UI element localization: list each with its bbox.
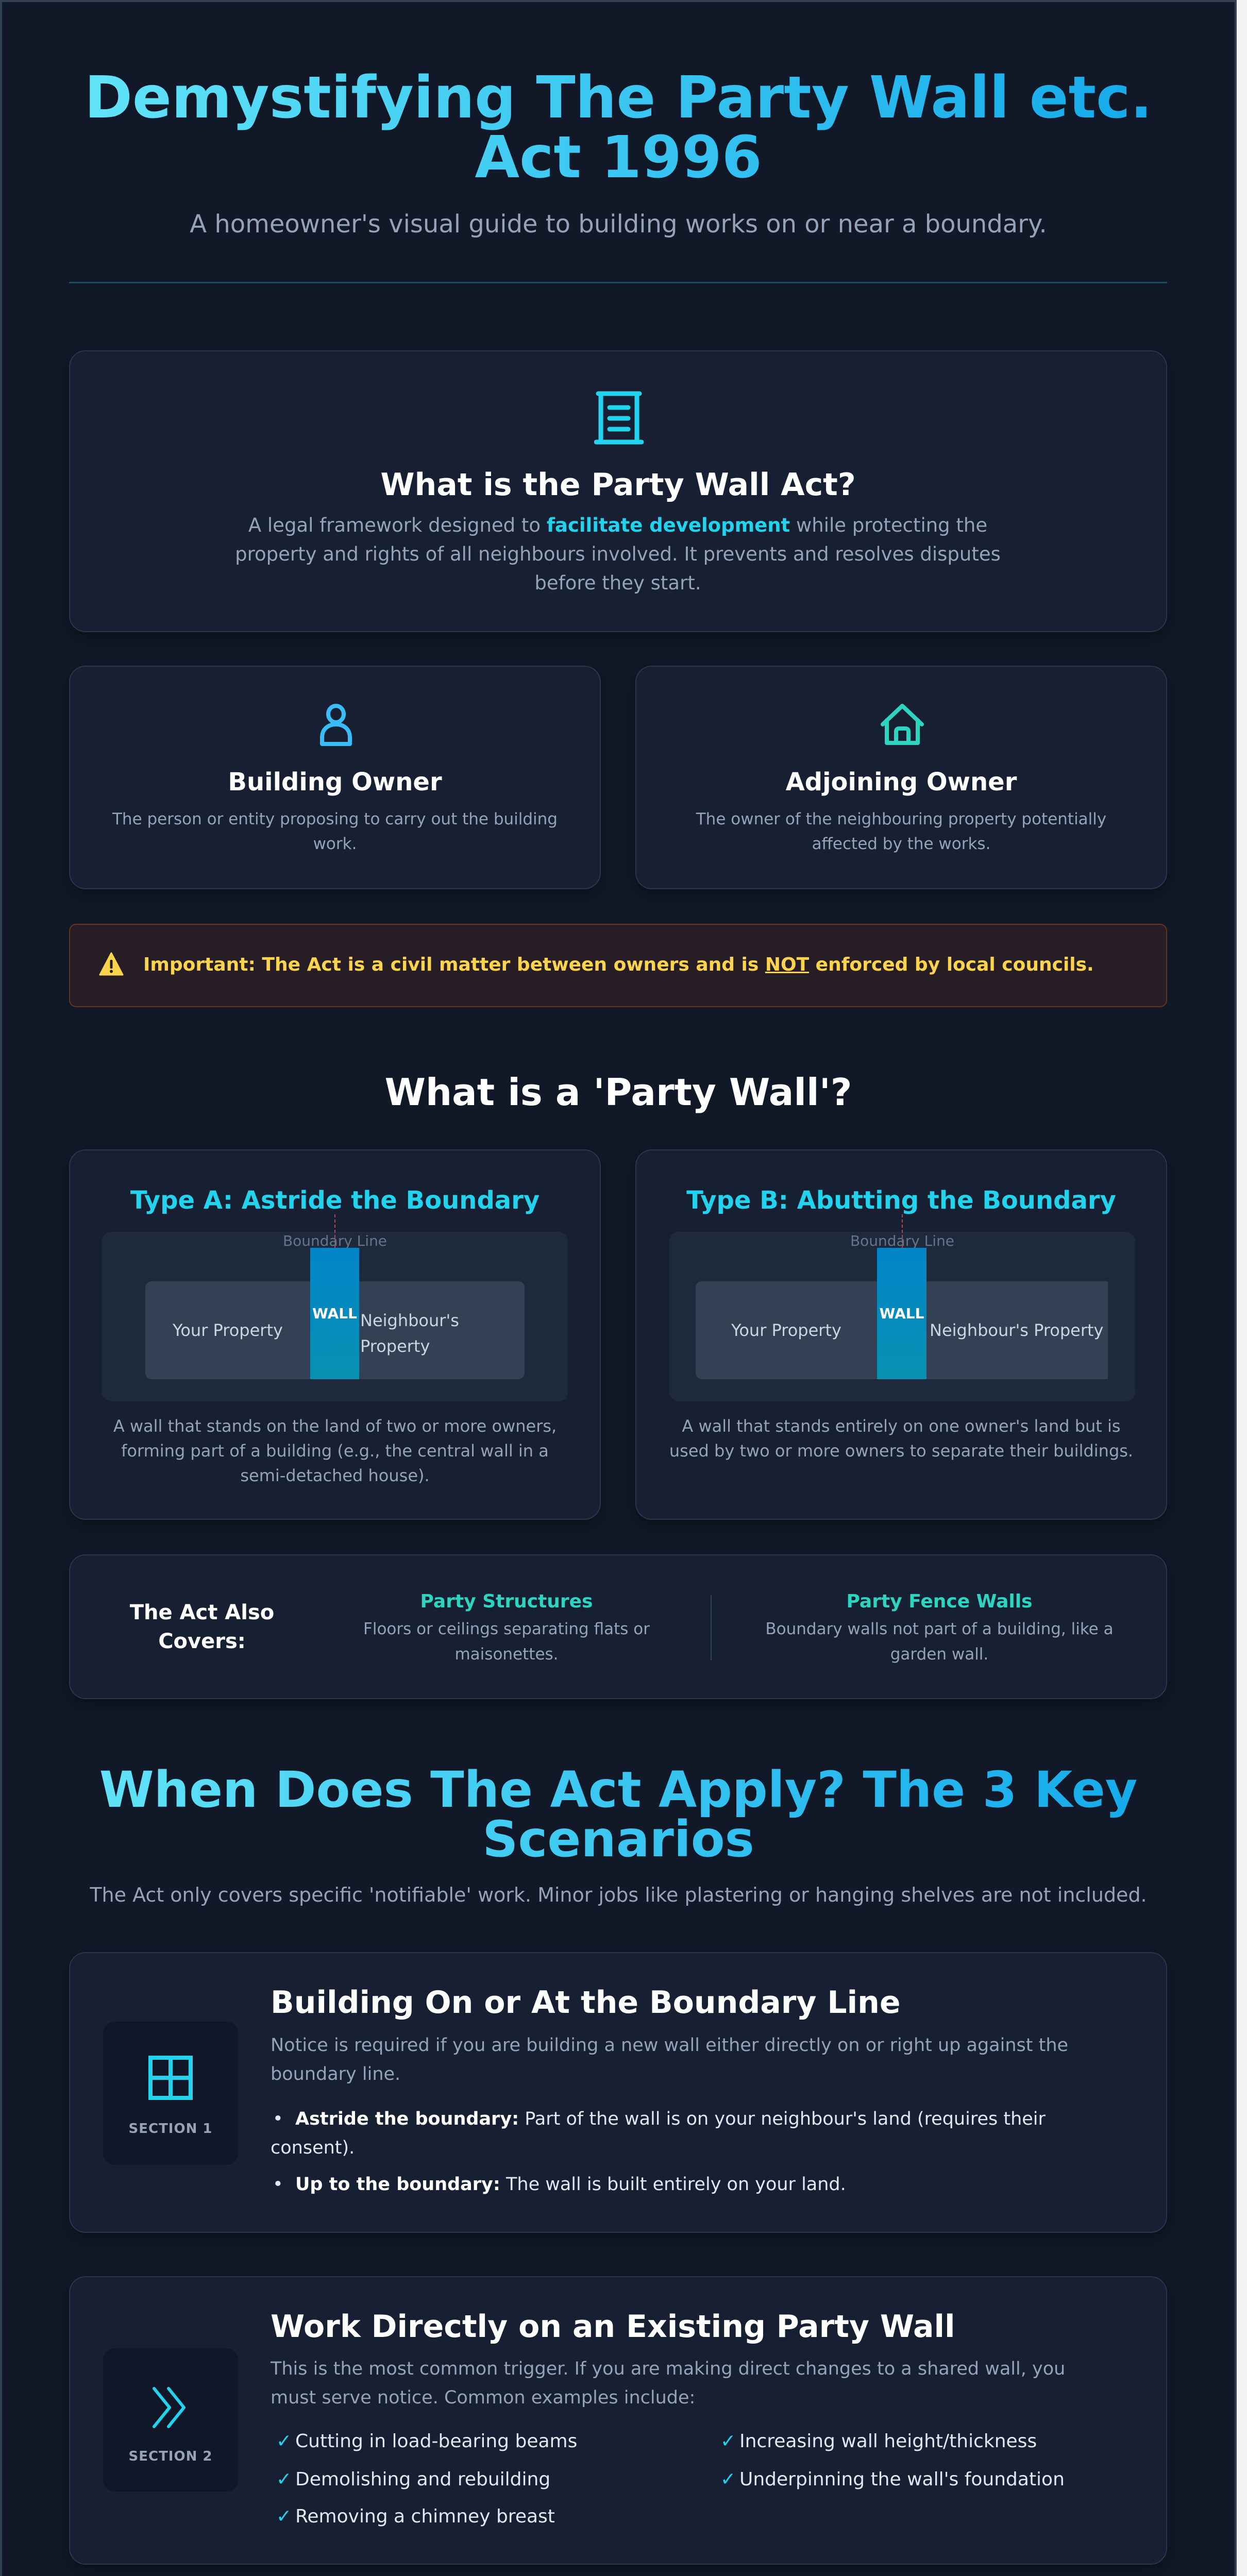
diagram: astride <box>102 1232 568 1401</box>
title: Demystifying The Party Wall etc. <box>85 64 1152 131</box>
description: The person or entity proposing to carry out the building work. <box>112 810 558 853</box>
bullet list: Up to the boundary: The wall is built entirely on your land. <box>295 2174 846 2195</box>
item: party fence walls: Party Fence Walls <box>847 1591 1032 1612</box>
panel: adjoining owner <box>635 666 1167 889</box>
bullet list <box>271 2109 1046 2195</box>
heading: Adjoining Owner <box>786 768 1017 796</box>
panel: section 2 <box>69 2276 1167 2565</box>
panel: the act also covers <box>69 1554 1167 1699</box>
heading: when does the act apply <box>0 1765 1237 1864</box>
section badge: SECTION 1 <box>129 2121 212 2137</box>
item: party structures: Party Structures <box>420 1591 593 1612</box>
checklist: Demolishing and rebuilding <box>295 2469 550 2490</box>
checklist: ✓ <box>276 2431 292 2452</box>
heading: Building On or At the Boundary Line <box>271 1985 901 2021</box>
icon: warning <box>99 952 124 976</box>
diagram: abutting: WALL <box>879 1305 924 1322</box>
label: The Act Also Covers: <box>130 1601 274 1653</box>
subtitle: The Act only covers specific 'notifiable' work. Minor jobs like plastering or hanging shelves are not included. <box>90 1884 1147 1906</box>
section badge <box>103 2348 238 2492</box>
checklist <box>276 2431 1065 2527</box>
section badge <box>103 2022 238 2165</box>
checklist: ✓ <box>720 2469 736 2490</box>
title: Act 1996 <box>475 124 762 191</box>
section badge: SECTION 2 <box>129 2449 212 2464</box>
checklist: ✓ <box>720 2431 736 2452</box>
bullet list: Astride the boundary: Part of the wall is on your neighbour's land (requires their consent). <box>271 2109 1046 2158</box>
warning text: Important: The Act is a civil matter between owners and is NOT enforced by local councils. <box>143 954 1094 975</box>
diagram: astride: Boundary Line <box>283 1232 387 1249</box>
icon: house <box>881 704 924 745</box>
diagram: abutting <box>669 1232 1135 1401</box>
heading: What is the Party Wall Act? <box>380 467 856 503</box>
icon: document <box>594 392 644 444</box>
checklist: Underpinning the wall's foundation <box>739 2469 1065 2490</box>
checklist: ✓ <box>276 2469 292 2490</box>
checklist: Cutting in load-bearing beams <box>295 2431 577 2452</box>
checklist: Increasing wall height/thickness <box>739 2431 1037 2452</box>
panel: type A <box>69 1149 601 1520</box>
icon: grid <box>148 2056 193 2100</box>
panel: type B <box>635 1149 1167 1520</box>
title <box>0 68 1237 188</box>
diagram: abutting: Neighbour's Property <box>930 1320 1103 1340</box>
type A title: Type A: Astride the Boundary <box>130 1186 540 1215</box>
diagram: astride: WALL <box>312 1305 357 1322</box>
heading: Work Directly on an Existing Party Wall <box>271 2309 955 2345</box>
icon: person <box>320 704 352 746</box>
subtitle: A homeowner's visual guide to building works on or near a boundary. <box>190 210 1047 239</box>
heading: what is a party wall: What is a 'Party Wall'? <box>384 1071 852 1114</box>
panel: what is the party wall act <box>69 350 1167 632</box>
description: Notice is required if you are building a new wall either directly on or right up against the boundary line. <box>271 2035 1068 2084</box>
diagram: abutting: Boundary Line <box>850 1232 954 1249</box>
type B description: A wall that stands entirely on one owner's land but is used by two or more owners to separate their buildings. <box>669 1416 1133 1461</box>
panel: section 1 <box>69 1952 1167 2233</box>
checklist: ✓ <box>276 2506 292 2527</box>
description: The owner of the neighbouring property potentially affected by the works. <box>696 810 1106 853</box>
item: party structures <box>363 1591 650 1664</box>
panel: building owner <box>69 666 601 889</box>
item: party fence walls <box>765 1591 1114 1664</box>
heading: when does the act apply: Scenarios <box>482 1810 754 1868</box>
type B title: Type B: Abutting the Boundary <box>686 1186 1116 1215</box>
heading: Building Owner <box>228 768 442 796</box>
icon: chevrons <box>153 2387 186 2428</box>
callout: important warning <box>69 924 1167 1007</box>
body text: A legal framework designed to facilitate development while protecting the property and rights of all neighbours involved. It prevents and resolves disputes before they start. <box>235 514 1001 594</box>
heading: when does the act apply: When Does The Act Apply? The 3 Key <box>99 1761 1137 1819</box>
checklist: Removing a chimney breast <box>295 2506 555 2527</box>
diagram: abutting: Your Property <box>731 1320 841 1340</box>
type A description: A wall that stands on the land of two or more owners, forming part of a building (e.g., the central wall in a semi-detached house). <box>113 1416 557 1485</box>
bullet list: • <box>273 2174 283 2195</box>
diagram: astride: Neighbour's Property <box>360 1311 459 1356</box>
bullet list: • <box>273 2109 283 2129</box>
item: party fence walls: Boundary walls not part of a building, like a garden wall. <box>765 1620 1114 1664</box>
diagram: astride: Your Property <box>173 1320 283 1340</box>
description: This is the most common trigger. If you are making direct changes to a shared wall, you must serve notice. Common examples include: <box>271 2359 1065 2408</box>
item: party structures: Floors or ceilings separating flats or maisonettes. <box>363 1620 650 1664</box>
